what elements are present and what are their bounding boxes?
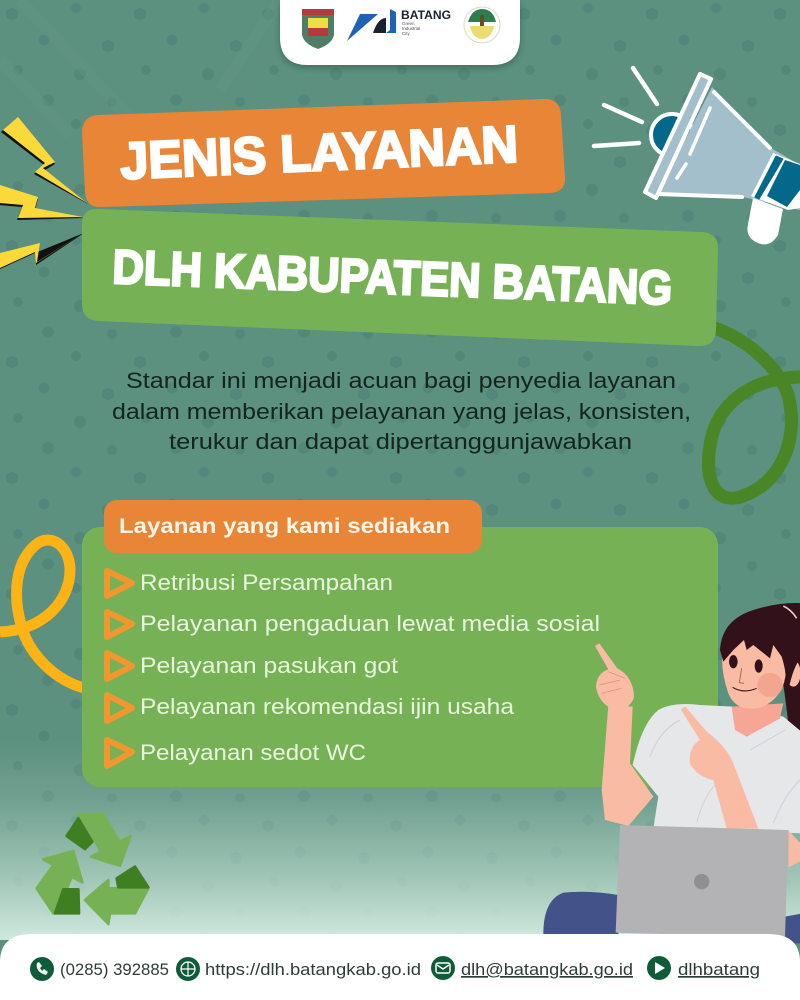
heading: services label — [104, 500, 482, 553]
contact: social — [647, 956, 760, 980]
intro text: Standar ini menjadi acuan bagi penyedia layanan — [126, 368, 676, 393]
list item: Retribusi Persampahan: Retribusi Persampahan — [140, 570, 393, 595]
title: DLH Kabupaten Batang banner: DLH KABUPATEN BATANG — [112, 241, 673, 315]
logo: Batang Green Industrial City: Green — [402, 21, 415, 26]
illustration: woman with laptop — [543, 603, 800, 943]
logo: tree emblem — [464, 7, 500, 43]
logo: Batang Green Industrial City: BATANG — [401, 10, 451, 22]
contact: website — [176, 957, 421, 981]
contact: website: https://dlh.batangkab.go.id — [205, 960, 421, 979]
list item: Pelayanan pasukan got: Pelayanan pasukan got — [140, 653, 398, 678]
ear — [786, 660, 800, 687]
neck — [732, 703, 783, 737]
pointing hand left — [595, 643, 634, 711]
contact: phone — [30, 957, 169, 981]
logo: Batang Green Industrial City — [347, 9, 451, 41]
icon: megaphone — [594, 68, 800, 244]
contact: email — [431, 956, 633, 980]
hair — [720, 603, 800, 698]
panel: services — [82, 500, 718, 787]
shirt — [633, 704, 800, 833]
intro text: dalam memberikan pelayanan yang jelas, konsisten, — [112, 399, 691, 424]
intro text — [112, 368, 691, 454]
logo tab — [280, 0, 520, 65]
contact: email: dlh@batangkab.go.id — [461, 960, 633, 979]
icon: recycle symbol — [37, 814, 148, 924]
jeans — [543, 892, 800, 943]
logo: Batang Green Industrial City: Industrial — [402, 26, 420, 31]
contact: phone: (0285) 392885 — [60, 960, 169, 979]
title: Jenis Layanan banner: JENIS LAYANAN — [119, 116, 519, 191]
logo: Batang regency emblem — [302, 9, 334, 49]
contact: social: dlhbatang — [678, 960, 760, 979]
hair back — [773, 603, 800, 743]
decoration: lightning bolts — [0, 117, 88, 269]
left arm — [602, 705, 653, 826]
heading: services label: Layanan yang kami sediakan — [119, 515, 450, 538]
decoration: green loop — [709, 327, 800, 498]
laptop — [616, 825, 788, 937]
list item: Pelayanan sedot WC: Pelayanan sedot WC — [140, 740, 366, 765]
logo: Batang Green Industrial City: City — [402, 31, 410, 36]
list item: Pelayanan pengaduan: Pelayanan pengaduan lewat media sosial — [140, 611, 600, 636]
intro text: terukur dan dapat dipertanggunjawabkan — [169, 429, 632, 454]
pointing hand right and forearm — [681, 707, 758, 829]
decoration: yellow loop — [0, 540, 84, 688]
right side arm — [788, 830, 800, 867]
title: DLH Kabupaten Batang banner — [82, 209, 718, 346]
list item: Pelayanan rekomendasi: Pelayanan rekomendasi ijin usaha — [140, 694, 515, 719]
face — [722, 633, 786, 709]
footer bar — [0, 934, 800, 1000]
title: Jenis Layanan banner — [82, 99, 565, 207]
